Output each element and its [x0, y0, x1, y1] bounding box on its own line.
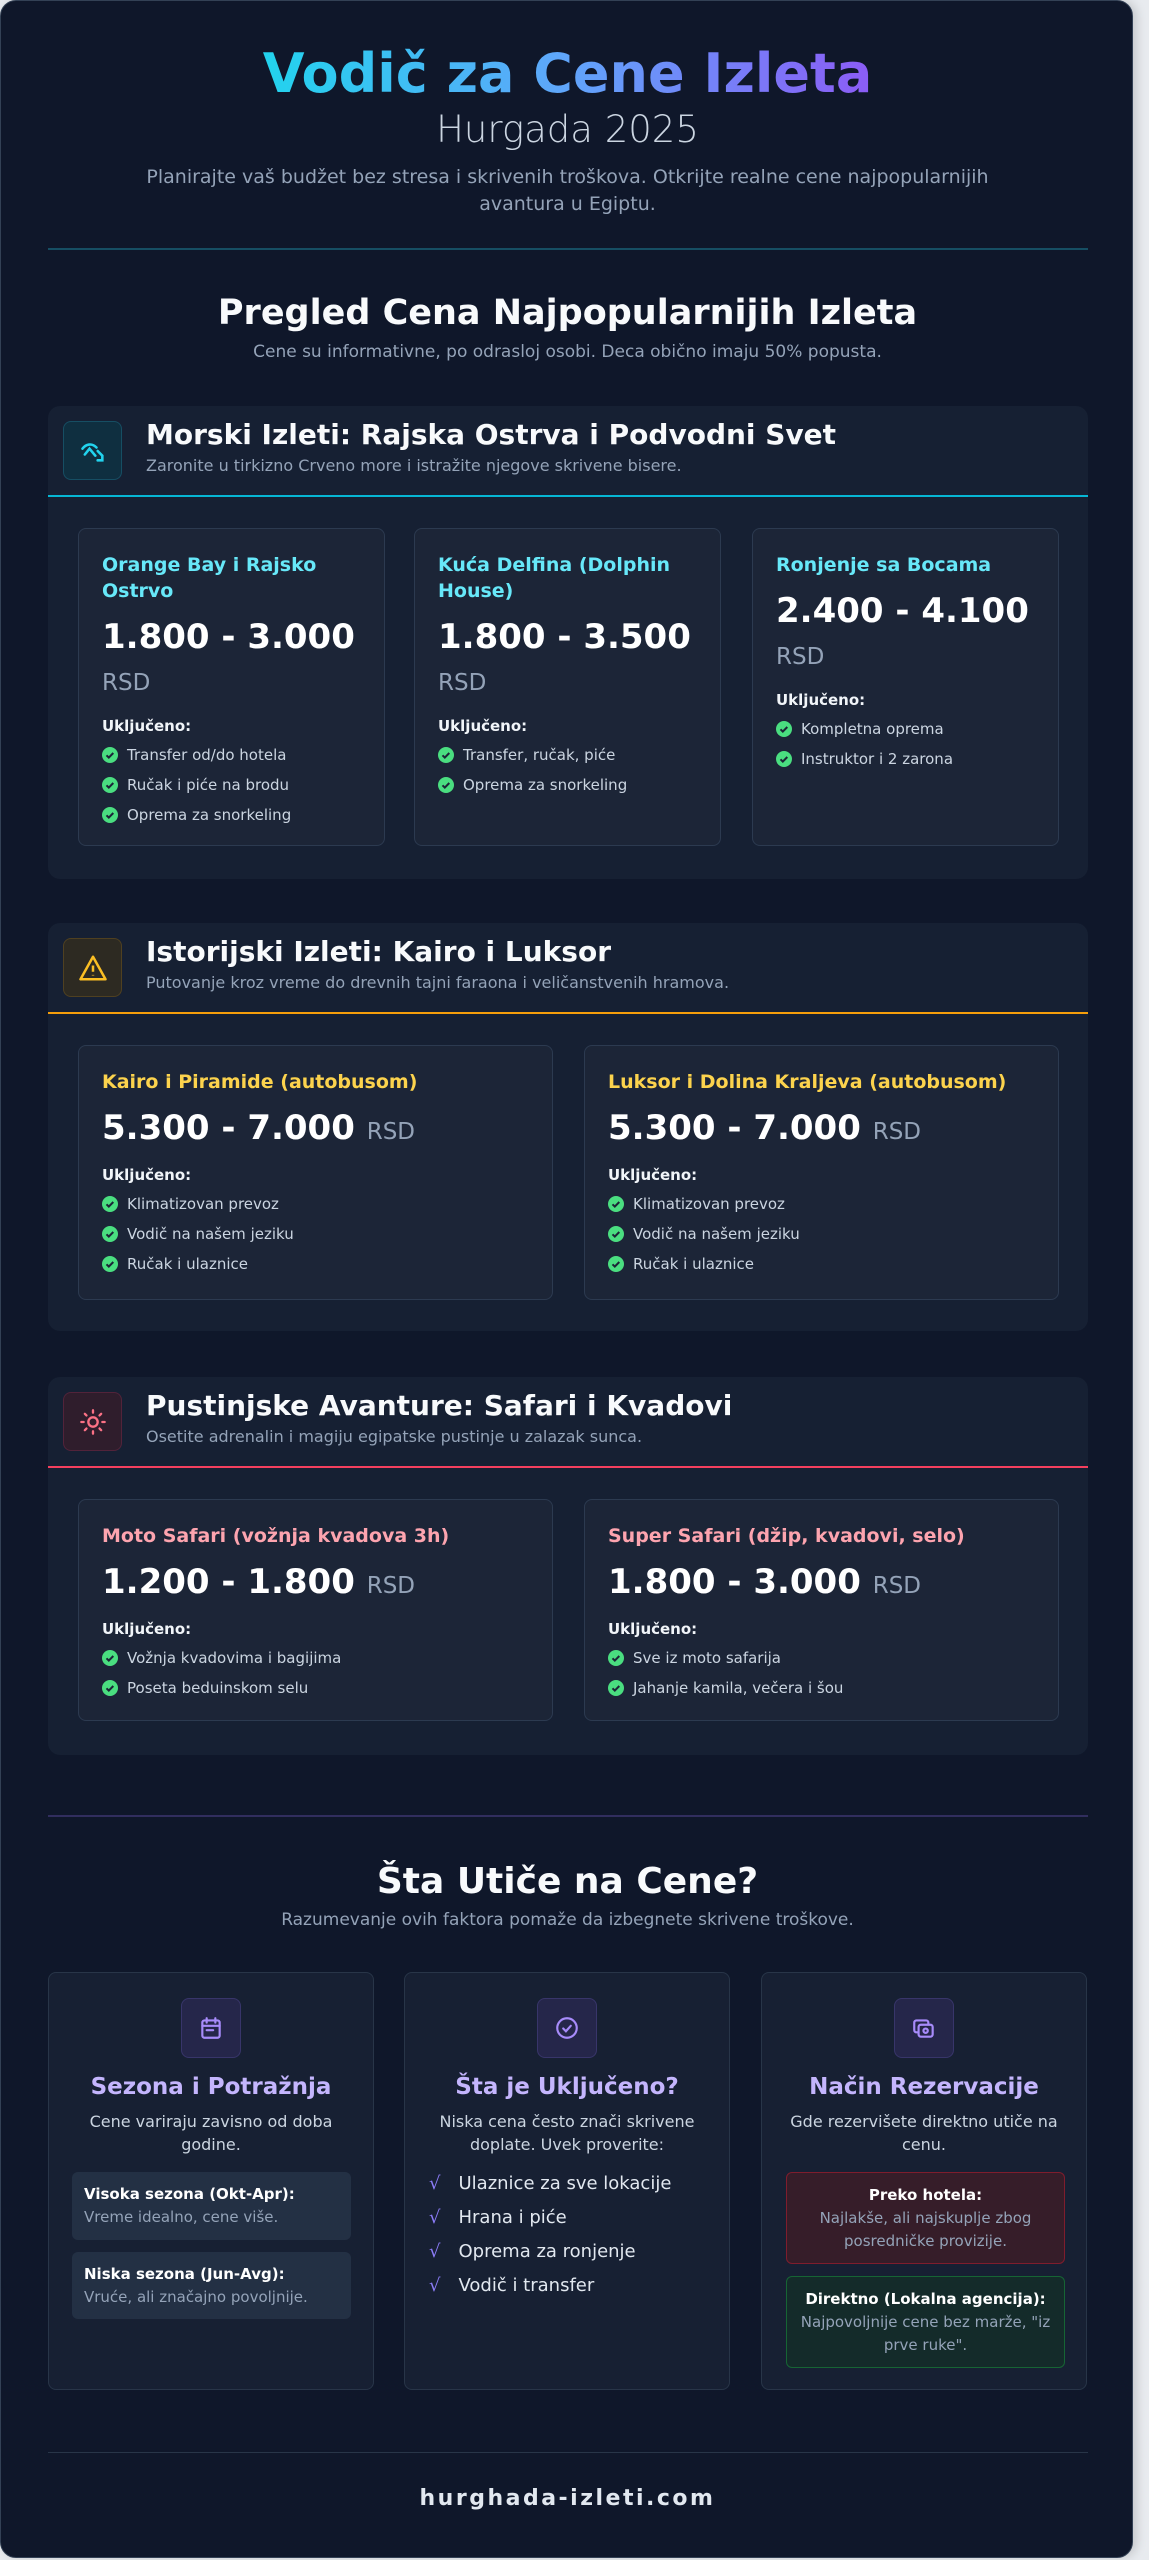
icon: waves — [63, 421, 122, 480]
card: Diving: 2.400 - 4.100 RSD — [776, 591, 1029, 670]
checklist: √ Ulaznice za sve lokacije — [429, 2173, 671, 2194]
checklist: √ Vodič i transfer — [429, 2275, 594, 2296]
low season box: Niska sezona (Jun-Avg): — [84, 2265, 285, 2283]
card: Dolphin House: 1.800 - 3.500 RSD — [438, 617, 691, 696]
panel heading: Morski Izleti: Rajska Ostrva i Podvodni Svet — [146, 418, 836, 451]
card: Orange Bay — [78, 528, 385, 846]
card: Cairo: Kairo i Piramide (autobusom) — [102, 1071, 417, 1093]
low season box: Vruće, ali značajno povoljnije. — [84, 2288, 308, 2306]
card: Diving: Instruktor i 2 zarona — [801, 750, 953, 768]
direct booking box: Najpovoljnije cene bez marže, "iz prve ruke". — [801, 2313, 1050, 2354]
checklist: √ Hrana i piće — [429, 2207, 567, 2228]
card: Luxor: Ručak i ulaznice — [633, 1255, 754, 1273]
card: Moto Safari: Poseta beduinskom selu — [127, 1679, 308, 1697]
hotel booking box — [786, 2172, 1065, 2264]
card: Dolphin House — [414, 528, 721, 846]
card: Luxor — [584, 1045, 1059, 1300]
panel: season — [48, 1972, 374, 2390]
hotel booking box: Preko hotela: — [869, 2186, 982, 2204]
panel: sea trips — [48, 406, 1088, 879]
card: Super Safari: Jahanje kamila, večera i šou — [633, 1679, 843, 1697]
card: Moto Safari: Vožnja kvadovima i bagijima — [127, 1649, 341, 1667]
card: Cairo: Ručak i ulaznice — [127, 1255, 248, 1273]
panel: historic trips — [48, 923, 1088, 1331]
card: Moto Safari: 1.200 - 1.800 RSD — [102, 1562, 415, 1602]
subtitle: Hurgada 2025 — [436, 108, 699, 151]
card: Orange Bay: 1.800 - 3.000 RSD — [102, 617, 355, 696]
title: Vodič za Cene Izleta — [263, 42, 872, 105]
card: Luxor: 5.300 - 7.000 RSD — [608, 1108, 921, 1148]
panel: included — [404, 1972, 730, 2390]
card: Dolphin House: Uključeno: — [438, 717, 527, 735]
hotel booking box: Najlakše, ali najskuplje zbog posredničke provizije. — [820, 2209, 1031, 2250]
card: Luxor: Luksor i Dolina Kraljeva (autobusom) — [608, 1071, 1006, 1093]
factors heading: Šta Utiče na Cene? — [377, 1861, 758, 1902]
card: Dolphin House: Transfer, ručak, piće — [463, 746, 615, 764]
card: Luxor: Vodič na našem jeziku — [633, 1225, 800, 1243]
card: Luxor: Uključeno: — [608, 1166, 697, 1184]
card: Orange Bay: Transfer od/do hotela — [127, 746, 286, 764]
panel heading: Istorijski Izleti: Kairo i Luksor — [146, 935, 611, 968]
high season box: Vreme idealno, cene više. — [84, 2208, 278, 2226]
description: Niska cena često znači skrivene doplate. Uvek proverite: — [439, 2112, 694, 2154]
description: Gde rezervišete direktno utiče na cenu. — [790, 2112, 1058, 2154]
card: Super Safari: 1.800 - 3.000 RSD — [608, 1562, 921, 1602]
section heading: Pregled Cena Najpopularnijih Izleta — [218, 293, 917, 333]
checklist — [429, 2173, 671, 2296]
card: Moto Safari: Moto Safari (vožnja kvadova 3h) — [102, 1525, 449, 1547]
intro text: Planirajte vaš budžet bez stresa i skrivenih troškova. Otkrijte realne cene najpopularnijih avantura u Egiptu. — [146, 166, 989, 215]
card: Cairo: Vodič na našem jeziku — [127, 1225, 294, 1243]
panel heading: Pustinjske Avanture: Safari i Kvadovi — [146, 1389, 732, 1422]
card: Diving: Kompletna oprema — [801, 720, 944, 738]
card: Dolphin House: Kuća Delfina (Dolphin House) — [438, 554, 670, 602]
card: Cairo — [78, 1045, 553, 1300]
footer url: hurghada-izleti.com — [420, 2486, 715, 2511]
card: Diving — [752, 528, 1059, 846]
heading: Način Rezervacije — [809, 2074, 1039, 2100]
icon: sun — [63, 1392, 122, 1451]
card: Super Safari — [584, 1499, 1059, 1721]
heading: Sezona i Potražnja — [91, 2074, 331, 2100]
direct booking box — [786, 2276, 1065, 2368]
card: Orange Bay: Uključeno: — [102, 717, 191, 735]
card: Cairo: Klimatizovan prevoz — [127, 1195, 279, 1213]
icon: check circle — [537, 1998, 597, 2058]
factors subheading: Razumevanje ovih faktora pomaže da izbegnete skrivene troškove. — [281, 1910, 854, 1930]
card: Orange Bay: Ručak i piće na brodu — [127, 776, 289, 794]
high season box — [72, 2172, 351, 2240]
high season box: Visoka sezona (Okt-Apr): — [84, 2185, 295, 2203]
low season box — [72, 2252, 351, 2319]
checklist: √ Oprema za ronjenje — [429, 2241, 636, 2262]
card: Super Safari: Uključeno: — [608, 1620, 697, 1638]
card: Moto Safari — [78, 1499, 553, 1721]
direct booking box: Direktno (Lokalna agencija): — [805, 2290, 1046, 2308]
panel: desert adventures — [48, 1377, 1088, 1755]
panel subheading: Osetite adrenalin i magiju egipatske pustinje u zalazak sunca. — [146, 1427, 642, 1446]
section note: Cene su informativne, po odrasloj osobi. Deca obično imaju 50% popusta. — [253, 342, 882, 362]
panel: booking — [761, 1972, 1087, 2390]
card: Diving: Uključeno: — [776, 691, 865, 709]
card: Dolphin House: Oprema za snorkeling — [463, 776, 627, 794]
card: Super Safari: Super Safari (džip, kvadovi, selo) — [608, 1525, 965, 1547]
panel subheading: Putovanje kroz vreme do drevnih tajni faraona i veličanstvenih hramova. — [146, 973, 729, 992]
card: Orange Bay: Orange Bay i Rajsko Ostrvo — [102, 554, 316, 602]
panel subheading: Zaronite u tirkizno Crveno more i istražite njegove skrivene bisere. — [146, 456, 682, 475]
description: Cene variraju zavisno od doba godine. — [90, 2112, 332, 2154]
card: Luxor: Klimatizovan prevoz — [633, 1195, 785, 1213]
card: Orange Bay: Oprema za snorkeling — [127, 806, 291, 824]
card: Cairo: Uključeno: — [102, 1166, 191, 1184]
icon: calendar — [181, 1998, 241, 2058]
card: Super Safari: Sve iz moto safarija — [633, 1649, 781, 1667]
card: Cairo: 5.300 - 7.000 RSD — [102, 1108, 415, 1148]
heading: Šta je Uključeno? — [455, 2074, 679, 2100]
icon: warning triangle — [63, 938, 122, 997]
card: Moto Safari: Uključeno: — [102, 1620, 191, 1638]
card: Diving: Ronjenje sa Bocama — [776, 554, 991, 576]
icon: money — [894, 1998, 954, 2058]
